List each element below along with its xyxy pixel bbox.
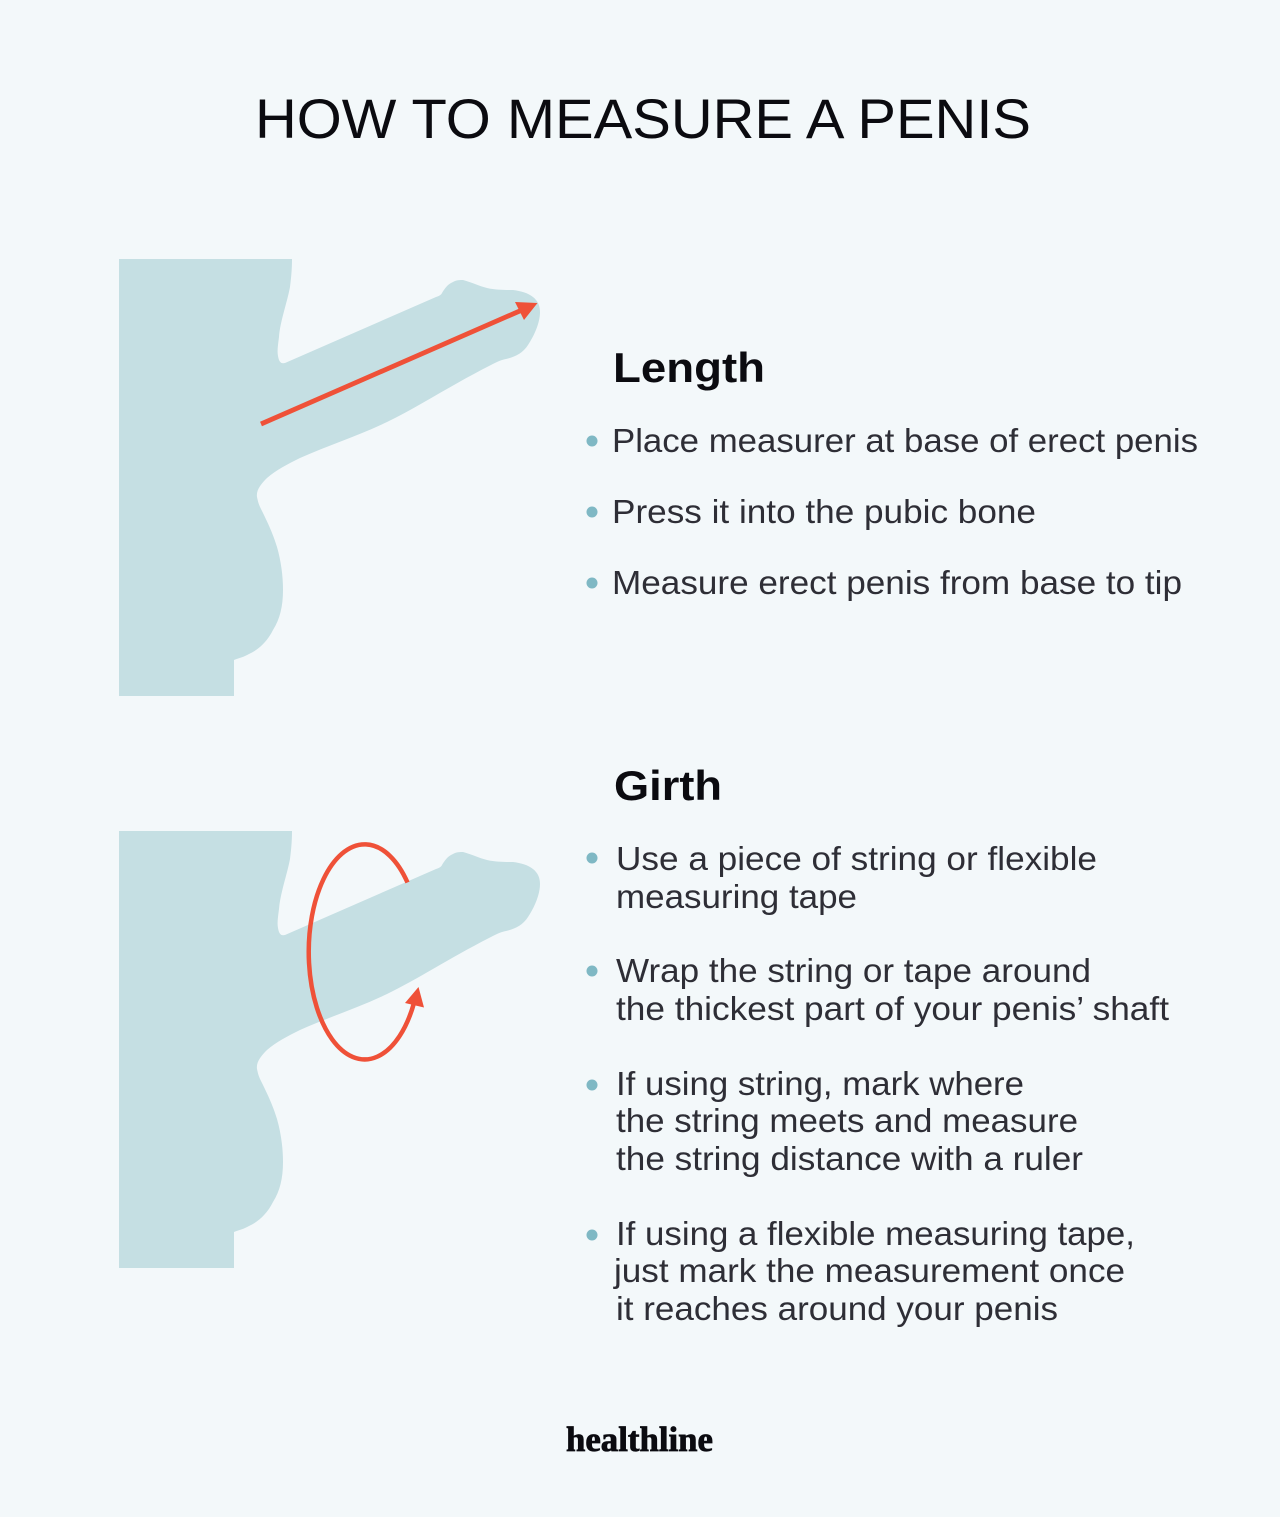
bullet: place measurer: Place measurer at base of erect penis: [612, 422, 1198, 459]
panel: length illustration: [119, 259, 540, 696]
bullet: wrap: the thickest part of your penis’ shaft: [616, 990, 1169, 1027]
bullet: using string: If using string, mark where: [616, 1065, 1024, 1102]
bullet: wrap: [586, 952, 1169, 1027]
heading: length: Length: [613, 344, 765, 391]
bullet: using tape: just mark the measurement once: [613, 1252, 1125, 1289]
bullet: using tape: [586, 1215, 1135, 1327]
bullet: string or tape: [586, 840, 1097, 915]
bullet: press: Press it into the pubic bone: [612, 493, 1036, 530]
panel: length instructions: [586, 344, 1198, 601]
bullet: string or tape: Use a piece of string or flexible: [616, 840, 1097, 877]
bullet: using tape: it reaches around your penis: [616, 1290, 1058, 1327]
bullet: using tape: If using a flexible measuring tape,: [616, 1215, 1135, 1252]
arrow: length measurement: [261, 302, 538, 424]
bullet: string or tape: measuring tape: [616, 878, 857, 915]
bullet: using string: the string meets and measure: [616, 1102, 1078, 1139]
bullet: using string: the string distance with a ruler: [616, 1140, 1083, 1177]
arrow: girth wrap: [309, 844, 424, 1059]
panel: girth instructions: [586, 762, 1169, 1327]
body silhouette: length: [119, 259, 540, 696]
title: HOW TO MEASURE A PENIS: [255, 87, 1031, 150]
bullet: using string: [586, 1065, 1083, 1177]
bullet: measure: Measure erect penis from base to tip: [612, 564, 1182, 601]
panel: girth illustration: [119, 831, 540, 1268]
body silhouette: girth: [119, 831, 540, 1268]
logo: healthline: healthline: [566, 1420, 713, 1459]
bullet: wrap: Wrap the string or tape around: [616, 952, 1091, 989]
heading: girth: Girth: [614, 762, 722, 809]
